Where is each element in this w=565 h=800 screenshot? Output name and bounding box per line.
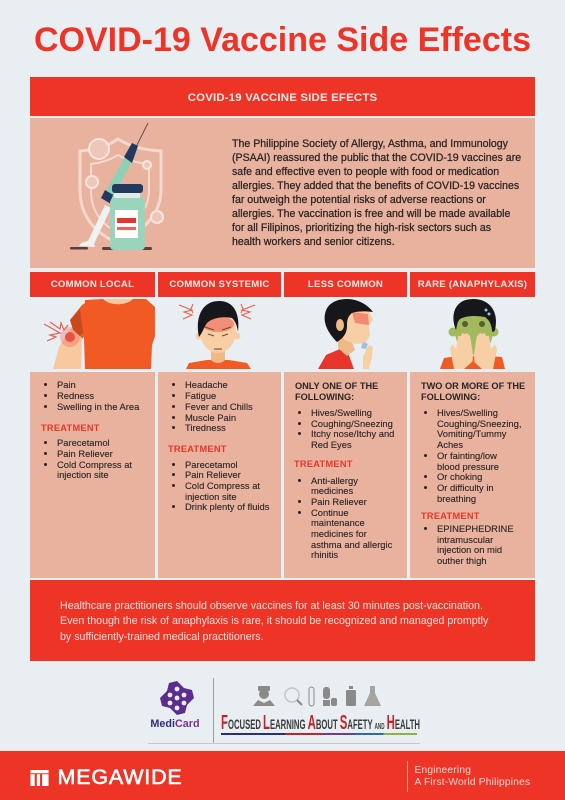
panel: rare details: FOLLOWING: <box>421 392 480 402</box>
logo text: Focused Learning About Safety and Health: FOCUSED LEARNING ABOUT SAFETY AND HEALTH <box>221 712 420 734</box>
panel: rare details: blood pressure <box>437 461 499 472</box>
panel: common systemic details: Tiredness <box>185 422 226 433</box>
panel: common systemic details: injection site <box>185 491 237 502</box>
text block: introduction: The Philippine Society of Allergy, Asthma, and Immunology <box>232 138 508 150</box>
column heading: less common <box>284 272 407 297</box>
text block: introduction: allergies. The vaccination is free and will be made available <box>232 208 510 220</box>
panel: less common details: Red Eyes <box>311 439 352 450</box>
panel: rare details: TWO OR MORE OF THE <box>421 381 525 391</box>
logo: MediCard: MediCard <box>150 718 200 730</box>
panel: rare details: Or fainting/low <box>437 450 497 461</box>
title: COVID-19 Vaccine Side Effects <box>34 20 531 58</box>
panel: less common details: ONLY ONE OF THE <box>295 381 378 391</box>
panel: rare details: Coughing/Sneezing, <box>437 418 521 429</box>
panel: common local details: injection site <box>57 469 109 480</box>
treatment heading: TREATMENT <box>41 422 100 432</box>
panel: common systemic details: Muscle Pain <box>185 412 236 422</box>
panel: common systemic details: Drink plenty of fluids <box>185 501 269 512</box>
treatment heading: TREATMENT <box>294 459 353 469</box>
panel: less common details: Coughing/Sneezing <box>311 418 393 429</box>
panel: rare details: EPINEPHEDRINE <box>437 523 514 534</box>
panel: common systemic details <box>158 372 281 578</box>
panel: common local details: Parecetamol <box>57 437 110 448</box>
column heading: common local <box>30 272 155 297</box>
divider <box>407 761 408 792</box>
panel: common systemic details: Headache <box>185 379 228 390</box>
panel: common local details: Pain <box>57 379 76 390</box>
panel: common systemic details: Fatigue <box>185 390 216 401</box>
panel: common local details: Cold Compress at <box>57 459 132 470</box>
callout: observation note: by sufficiently-trained medical practitioners. <box>60 630 264 642</box>
tagline: A First-World Philippines <box>414 777 530 788</box>
panel: common systemic details: Parecetamol <box>185 459 238 470</box>
column heading: rare: RARE (ANAPHYLAXIS) <box>418 279 527 290</box>
panel: rare details: Or choking <box>437 471 482 482</box>
divider <box>213 678 214 743</box>
text block: introduction: (PSAAI) reassured the public that the COVID-19 vaccines are <box>232 152 521 164</box>
icon: sore arm in orange shirt <box>30 297 155 371</box>
column heading: rare <box>410 272 535 297</box>
panel: common systemic details: Pain Reliever <box>185 469 241 480</box>
icon: Megawide mark <box>30 770 49 786</box>
icon: man coughing <box>284 297 407 371</box>
text block: introduction: health workers and senior citizens. <box>232 236 395 248</box>
panel: less common details: Pain Reliever <box>311 496 367 507</box>
treatment heading: TREATMENT <box>421 511 480 521</box>
panel: less common details: Hives/Swelling <box>311 407 372 418</box>
callout: observation note: Even though the risk of anaphylaxis is rare, it should be recognized and managed promptly <box>60 615 488 627</box>
logo: MediCard <box>150 681 200 730</box>
treatment heading: TREATMENT <box>168 444 227 454</box>
column heading: common systemic: COMMON SYSTEMIC <box>169 279 270 290</box>
icon: MediCard diamond <box>160 681 194 715</box>
text block: introduction <box>232 138 521 248</box>
tagline <box>414 765 530 788</box>
panel: rare details: Or difficulty in <box>437 482 494 493</box>
text block: introduction: far outweigh the potential risks of adverse reactions or <box>232 194 486 206</box>
text block: introduction: safe and effective even to people with food or medication <box>232 166 499 178</box>
panel: less common details: Anti-allergy <box>311 475 358 486</box>
panel: less common details: rhinitis <box>311 549 338 560</box>
footer band <box>0 751 565 800</box>
panel: rare details: Aches <box>437 439 463 450</box>
panel: less common details: FOLLOWING: <box>295 392 354 402</box>
panel: less common details: medicines for <box>311 528 367 539</box>
panel: common local details: Swelling in the Area <box>57 401 139 412</box>
column heading: common systemic <box>158 272 281 297</box>
panel: rare details: breathing <box>437 493 476 504</box>
panel: rare details: injection on mid <box>437 544 502 555</box>
icon: man with headache <box>158 297 281 371</box>
icons: health and safety pictograms <box>253 686 381 706</box>
panel: rare details: outher thigh <box>437 555 487 566</box>
callout: observation note <box>30 580 535 661</box>
panel: rare details <box>410 372 535 578</box>
column heading: common local: COMMON LOCAL <box>51 279 134 290</box>
panel: less common details: maintenance <box>311 517 365 528</box>
panel: section heading bar <box>30 77 535 116</box>
panel: rare details: intramuscular <box>437 534 493 545</box>
panel: common local details <box>30 372 155 578</box>
panel: rare details: Vomiting/Tummy <box>437 428 506 439</box>
panel: common local details: Pain Reliever <box>57 448 113 459</box>
column heading: less common: LESS COMMON <box>308 279 383 290</box>
logo: Megawide: MEGAWIDE <box>58 765 183 789</box>
tagline: Engineering <box>414 765 471 776</box>
panel: section heading bar: COVID-19 VACCINE SIDE EFECTS <box>188 92 377 104</box>
panel: less common details: medicines <box>311 485 353 496</box>
panel: rare details: Hives/Swelling <box>437 407 498 418</box>
panel: common local details: Redness <box>57 390 94 401</box>
panel: common systemic details: Cold Compress at <box>185 480 260 491</box>
callout: observation note: Healthcare practitioners should observe vaccines for at least 30 minutes post-vaccination. <box>60 600 483 612</box>
icon: vaccine syringe and vial <box>70 122 164 250</box>
panel: less common details: asthma and allergic <box>311 539 392 550</box>
text block: introduction: allergies. They added that the benefits of COVID-19 vaccines <box>232 180 519 192</box>
panel: less common details: Continue <box>311 507 349 518</box>
panel: less common details: Itchy nose/Itchy and <box>311 428 394 439</box>
panel: introduction <box>30 118 535 268</box>
panel: common systemic details: Fever and Chills <box>185 401 253 412</box>
text block: introduction: for all Filipinos, prioritizing the high-risk sectors such as <box>232 222 491 234</box>
panel: less common details <box>284 372 407 578</box>
icon: person with anaphylaxis covering mouth <box>410 297 535 371</box>
